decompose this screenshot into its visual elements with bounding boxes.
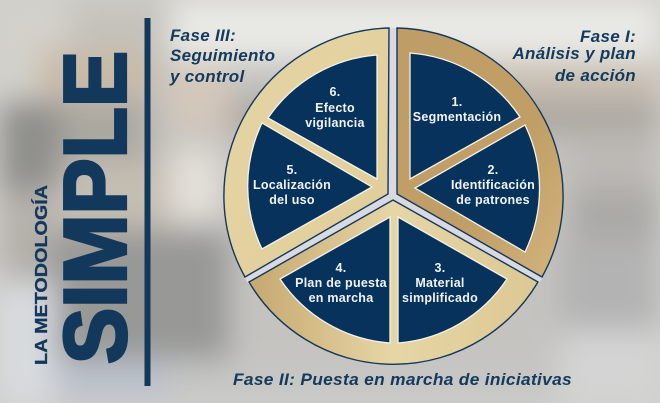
segment 6: Efecto vigilancia: [268, 55, 377, 179]
segment 3: Material simplificado: [398, 217, 507, 343]
label: Fase II: Fase II: Puesta en marcha de iniciativas: [233, 370, 572, 389]
segment 5: Localización del uso: [248, 123, 372, 249]
segment 4: Plan de puesta en marcha: [280, 217, 390, 343]
vertical divider bar: [144, 18, 150, 386]
segment 1: Segmentación: 1.: [452, 95, 462, 109]
segment 6: Efecto vigilancia: Efecto: [315, 101, 355, 115]
heading: LA METODOLOGÍA: LA METODOLOGÍA: [30, 185, 51, 365]
segment 2: Identificación de patrones: [415, 125, 540, 252]
label: Fase III: y control: [169, 67, 245, 86]
label: Fase III: [169, 26, 275, 86]
label: Fase I: Fase I:: [580, 27, 636, 46]
label: Fase III: Seguimiento: [170, 46, 275, 65]
segment 1: Segmentación: [410, 53, 520, 179]
segment 5: Localización del uso: del uso: [269, 193, 315, 207]
segment 3: Material simplificado: 3.: [435, 261, 445, 275]
label: Fase I: de acción: [555, 66, 636, 85]
segment 2: Identificación de patrones: 2.: [488, 163, 498, 177]
ring: Fase III segment: [224, 28, 389, 277]
segment 5: Localización del uso: 5.: [287, 163, 297, 177]
segment 6: Efecto vigilancia: vigilancia: [305, 116, 366, 130]
ring: Fase II segment: [249, 200, 538, 364]
segment 4: Plan de puesta en marcha: 4.: [336, 261, 346, 275]
heading: SIMPLE: SIMPLE: [46, 51, 144, 364]
label: Fase I: [511, 27, 636, 85]
segment 1: Segmentación: Segmentación: [413, 110, 501, 124]
segment 4: Plan de puesta en marcha: en marcha: [309, 291, 374, 305]
segment 2: Identificación de patrones: Identificación: [451, 178, 535, 192]
segment 5: Localización del uso: Localización: [253, 178, 331, 192]
segment 4: Plan de puesta en marcha: Plan de puesta: [295, 276, 388, 290]
segment 3: Material simplificado: simplificado: [402, 291, 478, 305]
wheel gap: light separators: [246, 28, 541, 280]
label: Fase III: Fase III:: [170, 26, 236, 45]
label: Fase I: Análisis y plan: [511, 44, 636, 63]
segment 6: Efecto vigilancia: 6.: [330, 85, 340, 99]
ring: Fase I segment: [397, 28, 563, 277]
segment 2: Identificación de patrones: de patrones: [456, 193, 530, 207]
segment 3: Material simplificado: Material: [415, 276, 465, 290]
methodology wheel: [224, 28, 563, 364]
